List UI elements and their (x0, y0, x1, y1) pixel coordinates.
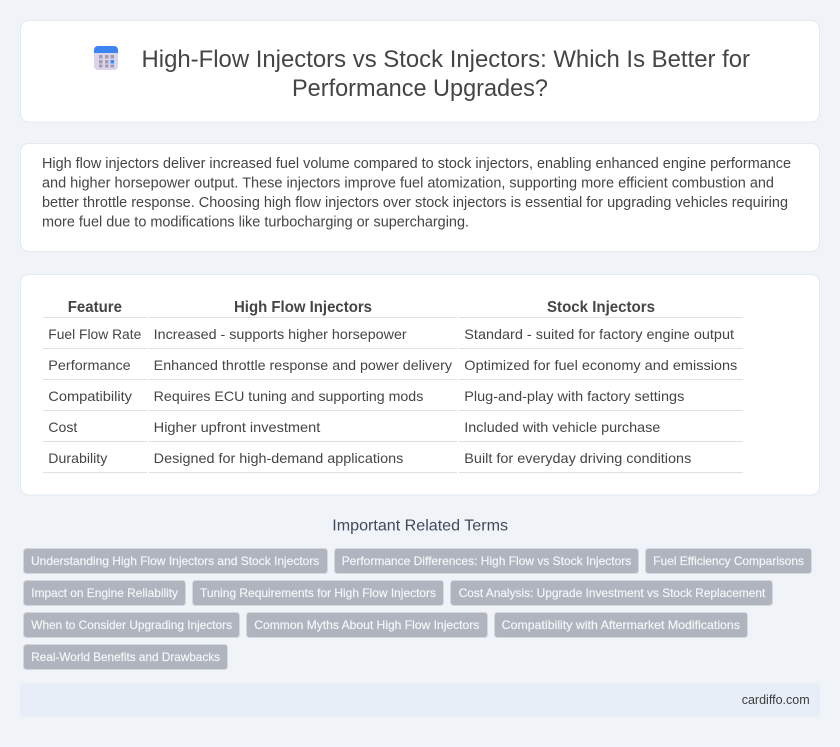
title (142, 46, 750, 102)
tag (192, 580, 444, 606)
tag (494, 612, 748, 638)
text block: intro paragraph: and higher horsepower output. These injectors improve fuel atomization, supporting more efficient combustion and (42, 176, 774, 192)
row: cost: Higher upfront investment (154, 419, 320, 435)
title: Performance Upgrades? (292, 75, 548, 102)
tag: When to Consider Upgrading Injectors (31, 618, 232, 632)
row: compatibility: Requires ECU tuning and supporting mods (154, 388, 423, 404)
tag: Tuning Requirements for High Flow Injectors (200, 586, 436, 600)
table header: High Flow Injectors (234, 299, 372, 316)
text block: intro paragraph: better throttle response. Choosing high flow injectors over stock injectors is essential for upgrading vehicles requiring (42, 195, 788, 211)
row: cost (48, 419, 661, 435)
row: fuel flow rate (48, 326, 734, 342)
tag (24, 644, 228, 670)
tag: Impact on Engine Reliability (31, 586, 178, 600)
row: fuel flow rate: Increased - supports higher horsepower (154, 326, 407, 342)
row: performance: Enhanced throttle response and power delivery (154, 357, 452, 373)
text block: intro paragraph (42, 156, 791, 230)
tag (24, 580, 186, 606)
row: performance (48, 357, 737, 373)
row: durability: Designed for high-demand applications (154, 450, 403, 466)
panel: introduction (20, 144, 820, 252)
tag (646, 548, 812, 574)
text block: intro paragraph: High flow injectors deliver increased fuel volume compared to stock injectors, enabling enhanced engine performance (42, 156, 791, 172)
tag: Common Myths About High Flow Injectors (254, 618, 479, 632)
row: fuel flow rate: Fuel Flow Rate (48, 326, 141, 342)
panel: title card (20, 20, 820, 122)
row: compatibility (48, 388, 684, 404)
row: performance: Optimized for fuel economy and emissions (464, 357, 737, 373)
panel: comparison table (20, 274, 820, 495)
tag: Real-World Benefits and Drawbacks (31, 650, 220, 664)
row: compatibility: Plug-and-play with factory settings (464, 388, 684, 404)
icon: calendar (94, 46, 118, 70)
heading: important related terms: Important Related Terms (332, 518, 508, 534)
row: cost: Cost (48, 419, 77, 435)
row: durability (48, 450, 691, 466)
footer source text: cardiffo.com (742, 693, 810, 707)
text block: intro paragraph: more fuel due to modifications like turbocharging or supercharging. (42, 214, 469, 230)
row: fuel flow rate: Standard - suited for factory engine output (464, 326, 734, 342)
row: cost: Included with vehicle purchase (464, 419, 661, 435)
tag list: related terms (24, 548, 812, 670)
tag (24, 612, 240, 638)
tag (246, 612, 488, 638)
tag: Fuel Efficiency Comparisons (653, 554, 804, 568)
table header: Stock Injectors (547, 299, 655, 316)
row: performance: Performance (48, 357, 131, 373)
title: High-Flow Injectors vs Stock Injectors: Which Is Better for (142, 46, 750, 73)
tag (334, 548, 638, 574)
tag: Cost Analysis: Upgrade Investment vs Stock Replacement (459, 586, 766, 600)
tag: Understanding High Flow Injectors and Stock Injectors (31, 554, 319, 568)
tag (450, 580, 772, 606)
row: durability: Durability (48, 450, 107, 466)
row: durability: Built for everyday driving conditions (464, 450, 691, 466)
tag (24, 548, 328, 574)
tag: Performance Differences: High Flow vs Stock Injectors (342, 554, 631, 568)
table header (68, 299, 655, 316)
footer bar (20, 683, 820, 717)
tag: Compatibility with Aftermarket Modifications (502, 618, 740, 632)
row: compatibility: Compatibility (48, 388, 132, 404)
table header: Feature (68, 299, 122, 316)
